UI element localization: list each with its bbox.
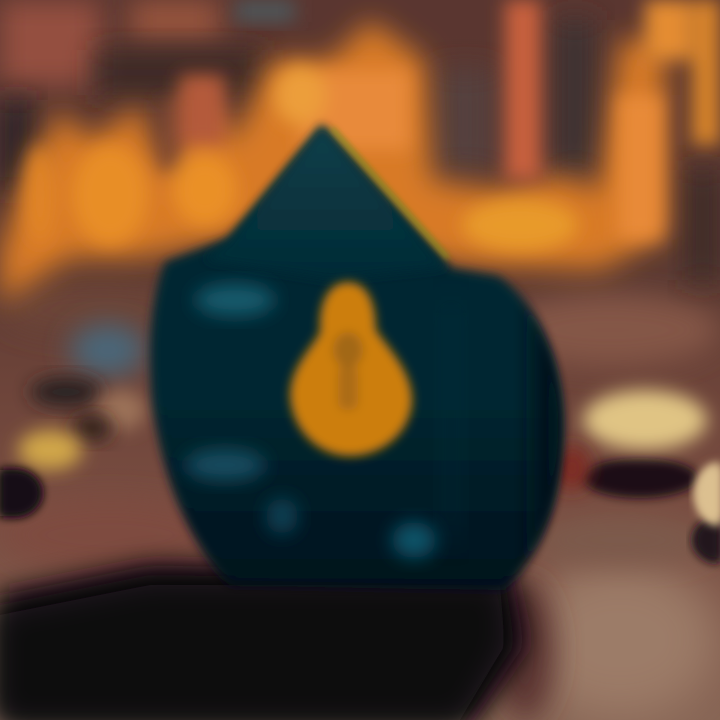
- right bowl: cream rim and dark base: [554, 390, 707, 498]
- shield: vertical seam: [442, 300, 460, 540]
- shield: blue smudge upper left: [195, 284, 275, 316]
- shield: blue smudge lower left: [185, 449, 265, 481]
- shield: darker right side: [452, 268, 562, 590]
- padlock: keyhole detail: [333, 332, 363, 368]
- background: dark upper wall patches: [0, 0, 720, 280]
- shield: yellow-green edge highlight: [332, 128, 448, 258]
- padlock: orange keyhole emblem: [290, 282, 412, 456]
- bottom shadow under the shield: [0, 565, 525, 720]
- shield: dark teal pointed body: [150, 124, 562, 590]
- shield: blue smudge bottom right: [392, 522, 436, 558]
- flames: orange band behind the shield: [0, 20, 665, 300]
- far right bowl: partly cropped: [694, 464, 720, 562]
- flames: vertical tongues and highlights: [24, 0, 720, 251]
- shield: blue smudge bottom centre: [266, 498, 298, 534]
- left side objects: blurred bowl and debris: [0, 324, 146, 516]
- shield: lit upper point: [205, 128, 446, 280]
